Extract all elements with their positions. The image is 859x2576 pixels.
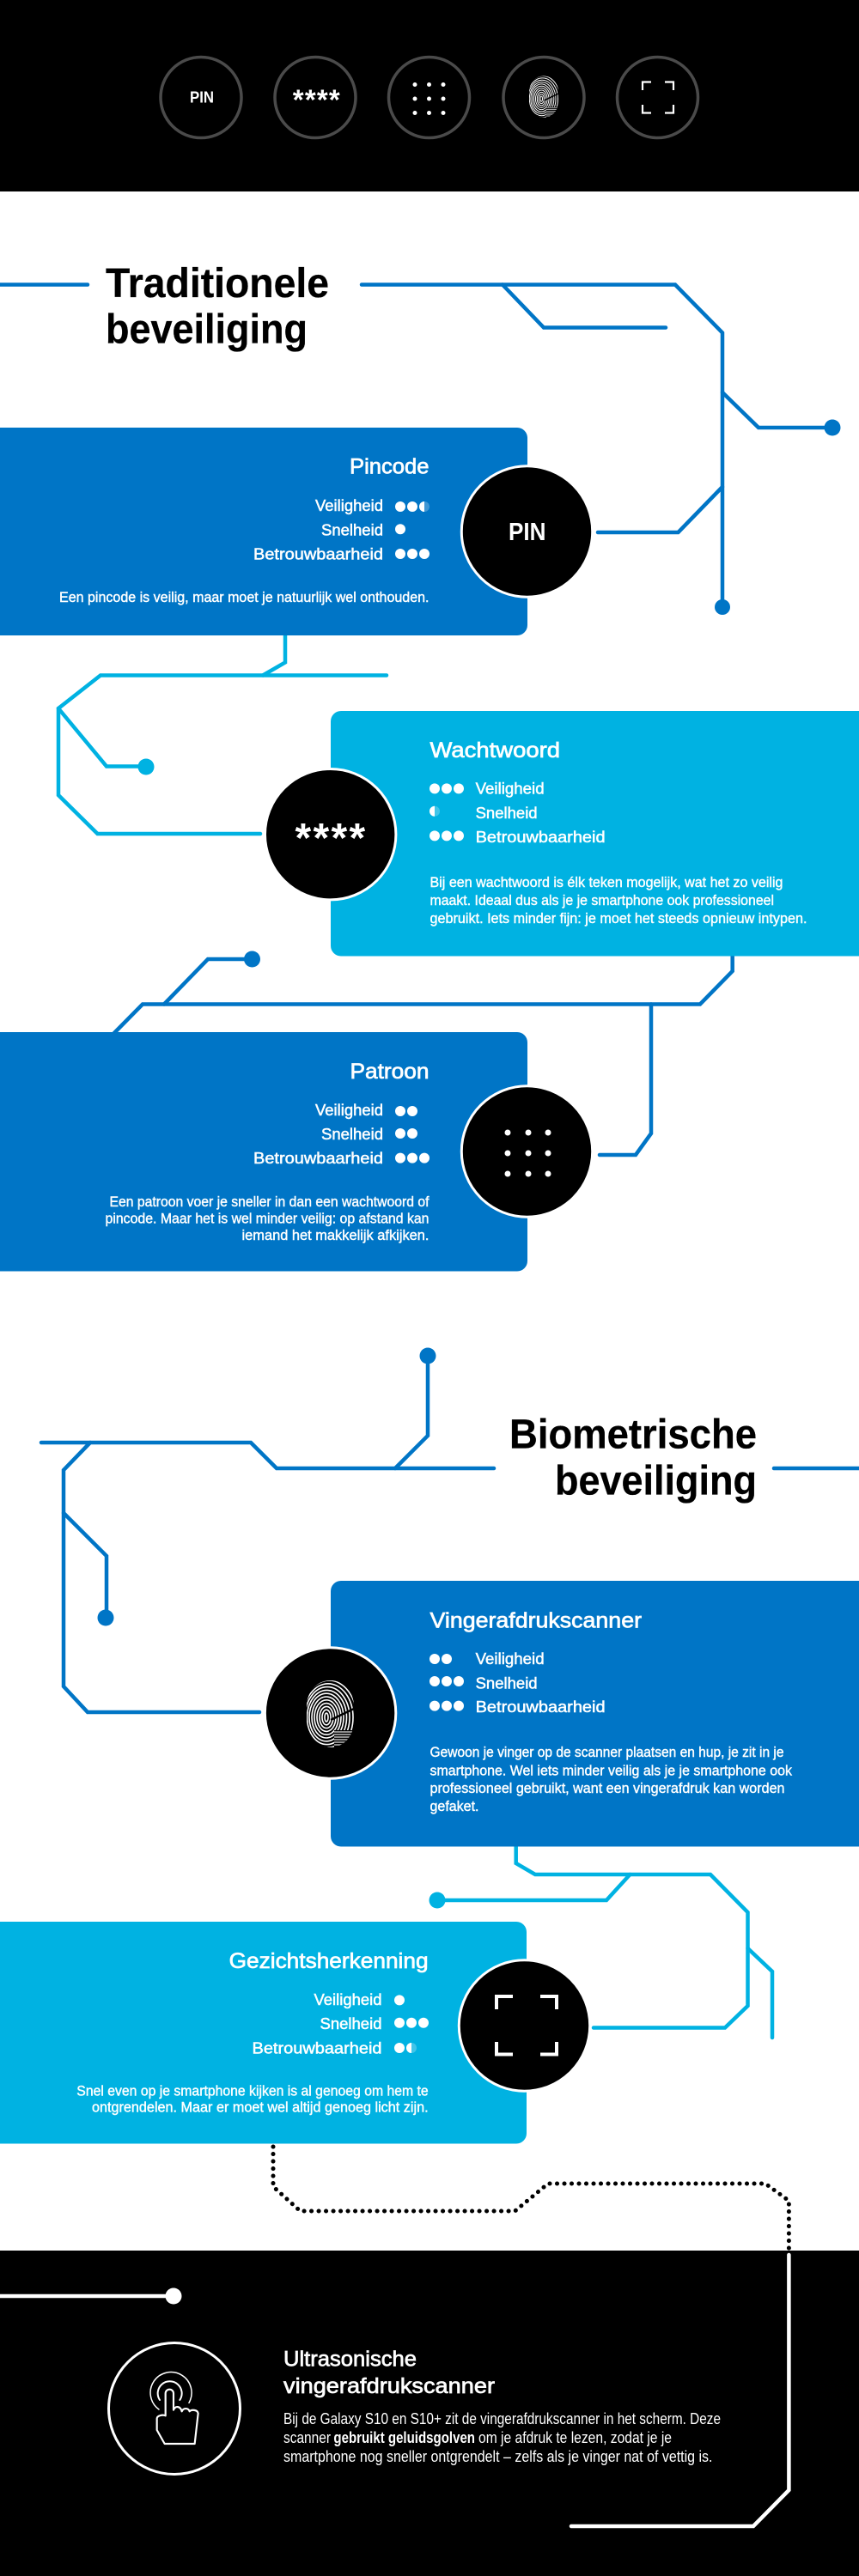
panel title: Gezichtsherkenning: Gezichtsherkenning xyxy=(229,1949,429,1973)
description: Wachtwoord: gebruikt. Iets minder fijn: je moet het steeds opnieuw intypen. xyxy=(430,910,807,927)
ratings: Gezichtsherkenning: Snelheid xyxy=(320,2015,381,2032)
connector: white line left with dot xyxy=(0,2287,182,2305)
ratings: Vingerafdrukscanner: Snelheid xyxy=(476,1674,538,1692)
ratings: Pincode: Veiligheid xyxy=(315,497,383,514)
description: Patroon: iemand het makkelijk afkijken. xyxy=(242,1227,430,1243)
dotted connector xyxy=(273,2147,789,2251)
connector lines: pincode to wachtwoord xyxy=(58,631,387,834)
panel: Pincode xyxy=(0,428,593,635)
ratings: Wachtwoord: Veiligheid xyxy=(476,781,545,798)
connector lines: wachtwoord to patroon xyxy=(113,951,733,1155)
description: Ultrasonische xyxy=(283,2410,721,2465)
description: Ultrasonische: smartphone nog sneller ontgrendelt – zelfs als je vinger nat of vettig is. xyxy=(283,2448,713,2465)
ratings: Wachtwoord: Betrouwbaarheid xyxy=(476,829,606,846)
description: Ultrasonische: gebruikt geluidsgolven xyxy=(333,2429,475,2446)
description: Patroon xyxy=(105,1194,430,1243)
description: Vingerafdrukscanner xyxy=(430,1744,792,1814)
icon: fingerprint badge xyxy=(265,1648,396,1778)
icon: stars badge: **** xyxy=(295,816,367,861)
ratings: Patroon: Snelheid xyxy=(321,1126,383,1143)
panel title: Wachtwoord: Wachtwoord xyxy=(430,738,560,762)
heading: Biometrische beveiliging xyxy=(509,1412,757,1504)
icon: fingerprint xyxy=(503,57,584,137)
icon: PIN badge: PIN xyxy=(509,519,546,546)
description: Ultrasonische: scanner xyxy=(283,2429,331,2446)
panel: Patroon xyxy=(0,1032,593,1271)
ratings: Wachtwoord xyxy=(430,781,606,846)
description: Vingerafdrukscanner: gefaket. xyxy=(430,1798,479,1814)
description: Wachtwoord xyxy=(430,874,807,927)
icon: PIN badge xyxy=(461,466,593,597)
title: Ultrasonische vingerafdrukscanner: Ultrasonische xyxy=(283,2348,417,2372)
header band xyxy=(0,0,859,191)
icon: password stars xyxy=(275,57,356,137)
heading: Biometrische beveiliging: beveiliging xyxy=(555,1458,757,1504)
ratings: Patroon xyxy=(253,1102,430,1167)
panel title: Patroon: Patroon xyxy=(350,1060,430,1084)
heading: Traditionele beveiliging: Traditionele xyxy=(106,261,329,307)
panel title: Vingerafdrukscanner: Vingerafdrukscanner xyxy=(430,1609,642,1633)
heading: Traditionele beveiliging xyxy=(106,261,329,352)
description: Patroon: pincode. Maar het is wel minder veilig: op afstand kan xyxy=(105,1211,430,1226)
description: Gezichtsherkenning: ontgrendelen. Maar er moet wel altijd genoeg licht zijn. xyxy=(92,2099,429,2116)
ratings: Vingerafdrukscanner: Veiligheid xyxy=(476,1650,545,1668)
ratings: Gezichtsherkenning xyxy=(253,1991,429,2057)
description: Wachtwoord: Bij een wachtwoord is élk teken mogelijk, wat het zo veilig xyxy=(430,874,783,890)
icon: password stars: **** xyxy=(293,84,341,116)
icon: stars badge xyxy=(265,769,396,900)
ratings: Vingerafdrukscanner: Betrouwbaarheid xyxy=(476,1698,606,1716)
icon: pattern badge xyxy=(461,1086,593,1217)
icon: pattern dots xyxy=(388,57,469,137)
connector lines: biometric section xyxy=(41,1348,859,1712)
ratings: Gezichtsherkenning: Betrouwbaarheid xyxy=(253,2040,381,2057)
ratings: Pincode: Betrouwbaarheid xyxy=(253,546,383,563)
description: Wachtwoord: maakt. Ideaal dus als je je smartphone ook professioneel xyxy=(430,892,774,908)
connector: white line right xyxy=(571,2255,789,2526)
icon: touch fingerprint hand xyxy=(108,2342,241,2475)
heading: Biometrische beveiliging: Biometrische xyxy=(509,1412,757,1458)
icon: face frame xyxy=(617,57,698,137)
description: Vingerafdrukscanner: professioneel gebruikt, want een vingerafdruk kan worden xyxy=(430,1780,785,1796)
description: Pincode: Een pincode is veilig, maar moet je natuurlijk wel onthouden. xyxy=(59,589,430,605)
title: Ultrasonische vingerafdrukscanner: vingerafdrukscanner xyxy=(283,2374,495,2398)
ratings: Patroon: Betrouwbaarheid xyxy=(253,1150,383,1167)
description: Gezichtsherkenning xyxy=(76,2082,429,2116)
panel: Gezichtsherkenning xyxy=(0,1922,590,2143)
ratings: Pincode xyxy=(253,497,430,563)
heading: Traditionele beveiliging: beveiliging xyxy=(106,307,308,352)
icon: PIN: PIN xyxy=(190,89,214,106)
description: Vingerafdrukscanner: smartphone. Wel iets minder veilig als je je smartphone ook xyxy=(430,1762,792,1779)
ratings: Vingerafdrukscanner xyxy=(430,1650,606,1716)
ratings: Wachtwoord: Snelheid xyxy=(476,805,538,822)
panel: Vingerafdrukscanner xyxy=(265,1581,859,1846)
connector lines: vingerafdruk to gezicht xyxy=(430,1842,772,2038)
ratings: Gezichtsherkenning: Veiligheid xyxy=(314,1991,381,2008)
ratings: Patroon: Veiligheid xyxy=(315,1102,383,1119)
description: Vingerafdrukscanner: Gewoon je vinger op de scanner plaatsen en hup, je zit in je xyxy=(430,1744,783,1760)
panel: Ultrasonische vingerafdrukscanner xyxy=(0,2251,859,2576)
title: Ultrasonische vingerafdrukscanner xyxy=(283,2348,495,2398)
panel: Wachtwoord xyxy=(265,711,859,957)
description: Ultrasonische: om je afdruk te lezen, zodat je je xyxy=(478,2429,672,2446)
description: Ultrasonische: Bij de Galaxy S10 en S10+ zit de vingerafdrukscanner in het scherm. Deze xyxy=(283,2410,721,2427)
description: Gezichtsherkenning: Snel even op je smartphone kijken is al genoeg om hem te xyxy=(76,2082,429,2099)
icon: PIN xyxy=(161,57,241,137)
description: Patroon: Een patroon voer je sneller in dan een wachtwoord of xyxy=(110,1194,430,1210)
panel title: Pincode: Pincode xyxy=(350,455,430,479)
connector lines: top section xyxy=(0,285,840,615)
icon: face badge xyxy=(459,1960,590,2091)
ratings: Pincode: Snelheid xyxy=(321,522,383,539)
